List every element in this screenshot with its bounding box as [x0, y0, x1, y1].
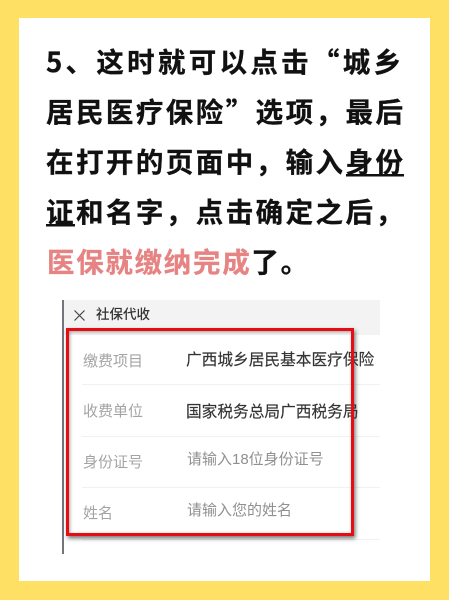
row 4 placeholder: 请输入您的姓名: [187, 502, 292, 519]
row 3 placeholder: 请输入18位身份证号: [187, 451, 324, 468]
row 4 label: 姓名: [83, 505, 113, 522]
close icon: [74, 310, 85, 321]
screenshot header bar: [64, 300, 380, 335]
screenshot left edge: [62, 300, 64, 554]
line 2: 居民医疗保险”选项，最后: [46, 90, 405, 130]
row 3 label: 身份证号: [83, 454, 143, 471]
header title: 社保代收: [96, 307, 150, 322]
heading text block: [46, 40, 405, 280]
row 2 value: 国家税务总局广西税务局: [186, 404, 359, 421]
row 2 label: 收费单位: [83, 403, 143, 420]
line 3: 在打开的页面中，输入身份: [46, 140, 405, 180]
line 1: 5、这时就可以点击“城乡: [46, 40, 404, 80]
line 5: 医保就缴纳完成了。: [47, 240, 310, 280]
row 1 value: 广西城乡居民基本医疗保险: [186, 352, 374, 369]
app screenshot: [62, 300, 380, 554]
line 4: 证和名字，点击确定之后，: [46, 190, 405, 230]
row 1 label: 缴费项目: [83, 353, 143, 370]
red highlight box: [66, 328, 354, 536]
